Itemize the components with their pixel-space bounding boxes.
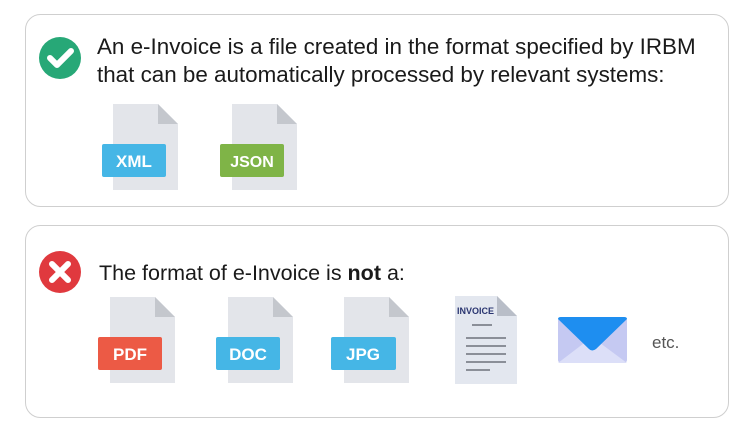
icon: DOC file: DOC bbox=[229, 345, 267, 364]
heading: e-Invoice definition: An e-Invoice is a file created in the format specified by IRBM bbox=[97, 34, 696, 59]
icon: red cross bbox=[39, 251, 81, 293]
heading: not a: The format of e-Invoice is not a: bbox=[99, 261, 405, 285]
icon: JSON file bbox=[220, 104, 297, 190]
icon: PDF file: PDF bbox=[113, 345, 147, 364]
icon: PDF file bbox=[98, 297, 175, 383]
icon: JSON file: JSON bbox=[230, 154, 274, 171]
heading: e-Invoice definition: that can be automatically processed by relevant systems: bbox=[97, 62, 665, 87]
icon: paper invoice: INVOICE bbox=[457, 306, 494, 316]
icon: green check bbox=[39, 37, 81, 79]
icon: DOC file bbox=[216, 297, 293, 383]
icon: XML file: XML bbox=[116, 152, 152, 171]
icon: XML file bbox=[102, 104, 178, 190]
text: etc: etc. bbox=[652, 333, 679, 352]
icon: JPG file: JPG bbox=[346, 345, 380, 364]
icon: email envelope bbox=[558, 317, 627, 363]
icon: paper invoice bbox=[455, 296, 517, 384]
icon: JPG file bbox=[331, 297, 409, 383]
panel: valid formats bbox=[26, 14, 728, 206]
panel: invalid formats bbox=[26, 226, 728, 418]
